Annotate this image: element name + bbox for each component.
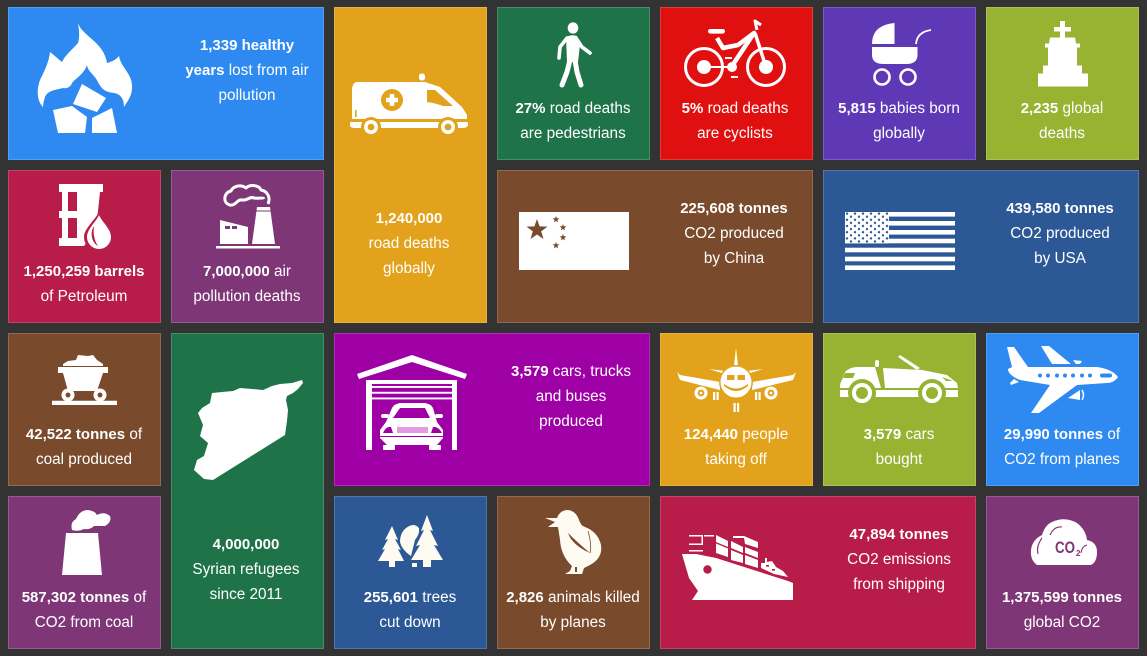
text: road deaths: road deaths: [369, 235, 449, 252]
panel: shipping emissions: [660, 496, 976, 649]
panel: petroleum: [8, 170, 161, 323]
icon: smoking chimney: [62, 510, 110, 575]
text: cars: [511, 363, 631, 430]
text: global CO2: global CO2: [1024, 614, 1100, 631]
icon: CO2 cloud: 2: [1076, 549, 1081, 558]
text: China: 225,608 tonnes: [680, 200, 788, 217]
text: taking off: 124,440 people: [684, 426, 788, 443]
text: deaths: 2,235 global: [1021, 100, 1103, 117]
text: shipping: from shipping: [853, 576, 945, 593]
text: road deaths: globally: [383, 260, 435, 277]
text: China: [680, 200, 788, 267]
text: healthy years: pollution: [218, 87, 275, 104]
text: China: CO2 produced: [684, 225, 784, 242]
text: animals: 2,826 animals killed: [506, 589, 640, 606]
panel: animals killed: [497, 496, 650, 649]
panel: air pollution deaths: [171, 170, 324, 323]
text: USA: CO2 produced: [1010, 225, 1110, 242]
text: air pollution: [193, 263, 301, 305]
panel: people taking off: [660, 333, 813, 486]
text: cars: and buses: [536, 388, 606, 405]
text: pedestrians: 27% road deaths: [515, 100, 631, 117]
text: healthy years: 1,339 healthy: [200, 37, 294, 54]
panel: trees cut down: [334, 496, 487, 649]
text: USA: [1006, 200, 1114, 267]
icon: gravestone: [1038, 21, 1088, 86]
icon: USA flag: [845, 212, 955, 270]
text: coal CO2: 587,302 tonnes of: [22, 589, 146, 606]
text: road deaths: 1,240,000: [376, 210, 442, 227]
icon: China flag: [519, 212, 629, 270]
panel: Syrian refugees: [171, 333, 324, 649]
text: cars: 3,579 cars, trucks: [511, 363, 631, 380]
text: animals: by planes: [540, 614, 606, 631]
icon: plane front view: [677, 348, 796, 412]
icon: convertible car: [840, 355, 958, 403]
text: cyclists: 5% road deaths: [682, 100, 788, 117]
icon: CO2 cloud: [1029, 518, 1098, 567]
text: shipping: [847, 526, 951, 593]
text: USA: by USA: [1034, 250, 1086, 267]
text: taking off: taking off: [705, 451, 767, 468]
text: coal CO2: CO2 from coal: [35, 614, 133, 631]
icon: pram: [872, 23, 932, 86]
panel: CO2 from coal: [8, 496, 161, 649]
text: healthy years: [185, 37, 309, 104]
text: deaths: [1021, 100, 1103, 142]
text: petroleum: 1,250,259 barrels: [24, 263, 144, 280]
icon: burning coal: [38, 23, 132, 133]
text: refugees: since 2011: [210, 586, 282, 603]
icon: barrel and drop: [59, 184, 111, 249]
text: babies: [838, 100, 960, 142]
text: babies: globally: [873, 125, 925, 142]
text: cars bought: bought: [876, 451, 922, 468]
panel: China CO2: [497, 170, 813, 323]
icon: CO2 cloud: CO: [1055, 538, 1075, 557]
text: cars bought: [864, 426, 934, 468]
icon: walking person: [557, 22, 592, 88]
icon: factory: [216, 184, 280, 248]
panel: cars trucks buses: [334, 333, 650, 486]
panel: USA CO2: [823, 170, 1139, 323]
text: shipping: CO2 emissions: [847, 551, 951, 568]
text: global CO2: 1,375,599 tonnes: [1002, 589, 1122, 606]
icon: map of Syria: [194, 380, 303, 480]
panel: road deaths globally: [334, 7, 487, 323]
text: coal: [26, 426, 142, 468]
text: planes CO2: [1004, 426, 1120, 468]
panel: global CO2: [986, 496, 1139, 649]
text: trees: cut down: [379, 614, 441, 631]
icon: container ship: [682, 535, 793, 600]
text: petroleum: of Petroleum: [41, 288, 127, 305]
icon: chick: [545, 510, 602, 574]
icon: trees: [378, 515, 443, 567]
text: trees: [364, 589, 456, 631]
text: air pollution: pollution deaths: [193, 288, 301, 305]
text: refugees: 4,000,000: [213, 536, 279, 553]
text: deaths: deaths: [1039, 125, 1085, 142]
text: coal: 42,522 tonnes of: [26, 426, 142, 443]
text: global CO2: [1002, 585, 1122, 635]
text: refugees: Syrian refugees: [192, 561, 300, 578]
text: air pollution: 7,000,000 air: [203, 263, 291, 280]
text: pedestrians: [515, 100, 631, 142]
icon: coal cart: [52, 355, 117, 405]
panel: global deaths: [986, 7, 1139, 160]
panel: coal produced: [8, 333, 161, 486]
text: healthy years: years lost from air: [185, 62, 309, 79]
text: trees: 255,601 trees: [364, 589, 456, 606]
panel: cyclists: [660, 7, 813, 160]
text: taking off: [684, 426, 788, 468]
icon: garage with car: [357, 355, 467, 450]
text: planes CO2: 29,990 tonnes of: [1004, 426, 1120, 443]
text: petroleum: [24, 263, 144, 305]
icon: ambulance: [350, 74, 468, 134]
text: pedestrians: are pedestrians: [520, 125, 626, 142]
icon: airliner: [1007, 346, 1118, 413]
panel: babies born: [823, 7, 976, 160]
text: cyclists: are cyclists: [697, 125, 773, 142]
text: cyclists: [682, 100, 788, 142]
text: cars bought: 3,579 cars: [864, 426, 934, 443]
panel: pedestrians: [497, 7, 650, 160]
text: babies: 5,815 babies born: [838, 100, 960, 117]
text: USA: 439,580 tonnes: [1006, 200, 1114, 217]
text: coal CO2: [22, 589, 146, 631]
text: animals: [506, 589, 640, 631]
panel: healthy years lost: [8, 7, 324, 160]
icon: bicycle: [684, 20, 786, 87]
text: road deaths: [369, 210, 449, 277]
panel: CO2 from planes: [986, 333, 1139, 486]
text: planes CO2: CO2 from planes: [1004, 451, 1120, 468]
text: China: by China: [704, 250, 764, 267]
text: coal: coal produced: [36, 451, 132, 468]
text: shipping: 47,894 tonnes: [849, 526, 949, 543]
text: refugees: [192, 536, 300, 603]
text: cars: produced: [539, 413, 603, 430]
panel: cars bought: [823, 333, 976, 486]
